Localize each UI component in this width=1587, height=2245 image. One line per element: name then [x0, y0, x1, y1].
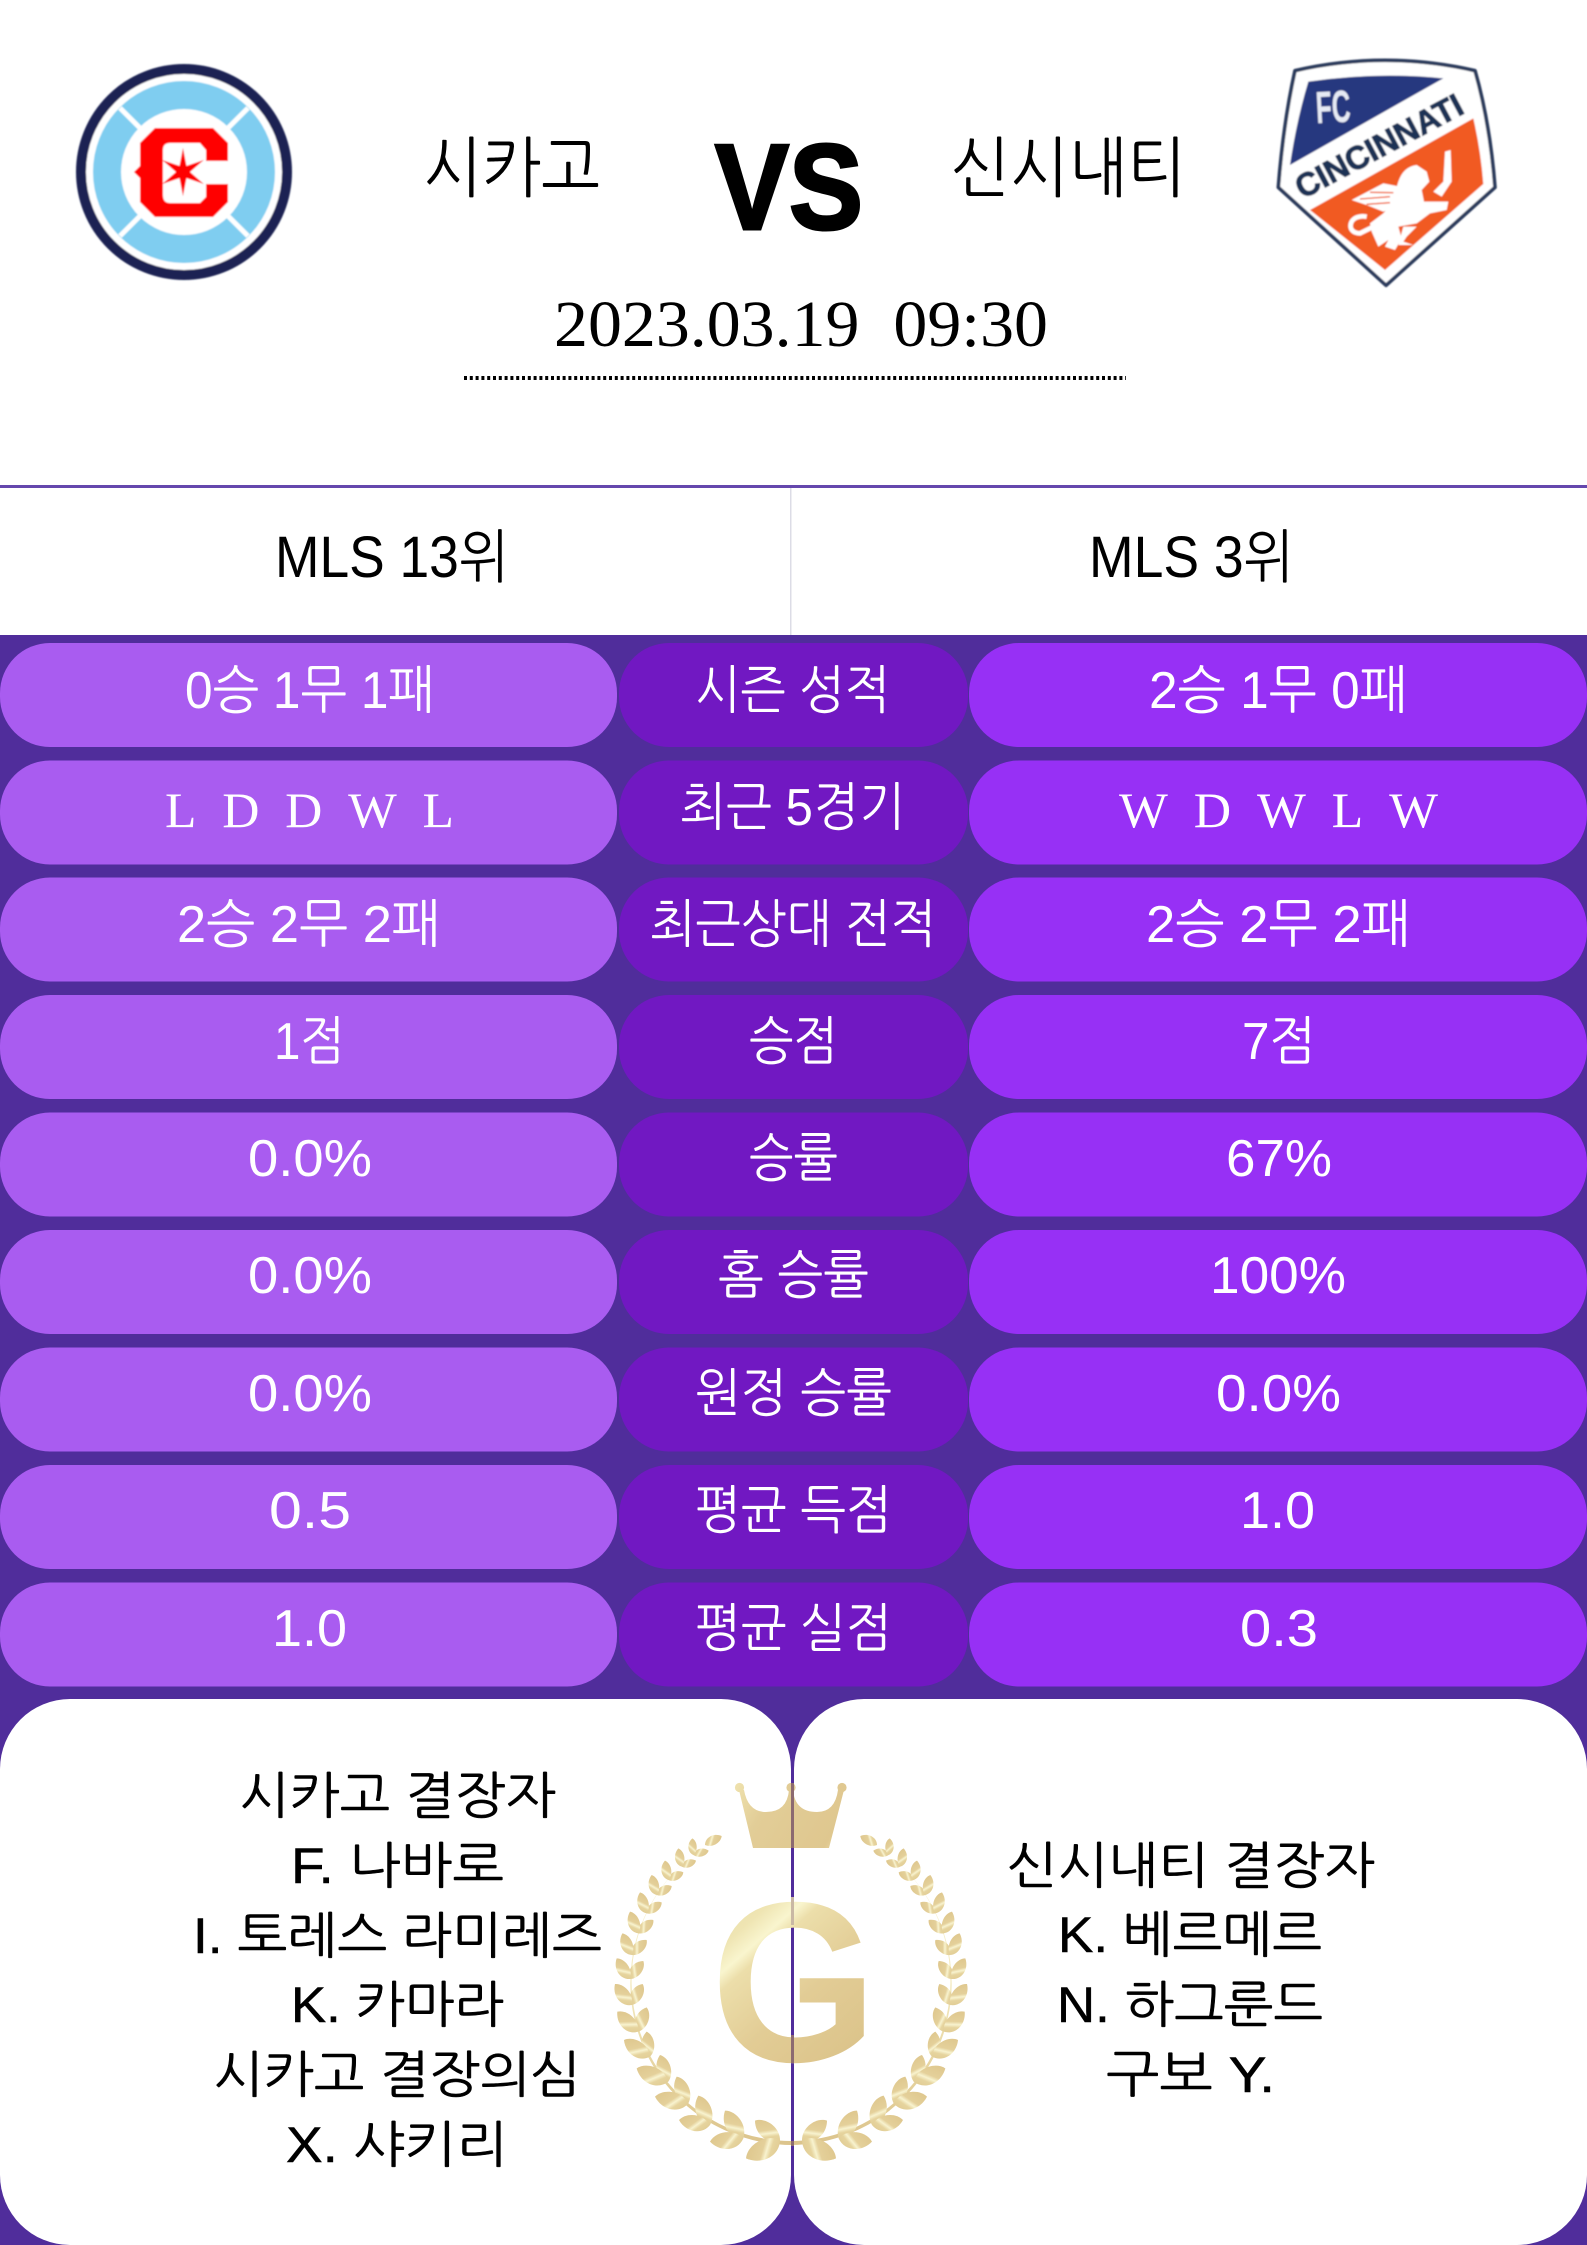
row: away win rate: 0.0% — [248, 1365, 372, 1423]
panel: Cincinnati absentees: 신시내티 결장자 — [1007, 1838, 1375, 1894]
panel: Cincinnati absentees: K. 베르메르 — [1058, 1907, 1322, 1963]
row: win rate: 0.0% — [248, 1130, 372, 1188]
standing: Chicago: MLS 13위 — [275, 525, 509, 590]
row: away win rate: 원정 승률 — [695, 1365, 892, 1423]
panel: Cincinnati absentees — [794, 1699, 1587, 2245]
panel: Chicago absentees: F. 나바로 — [291, 1838, 504, 1894]
row: win rate: 승률 — [749, 1130, 838, 1188]
row: average goals scored: 평균 득점 — [695, 1482, 892, 1540]
letter G: G — [711, 1856, 877, 2110]
row: average goals scored: 0.5 — [269, 1482, 351, 1540]
row: away win rate — [0, 1348, 1587, 1452]
row: average goals conceded: 1.0 — [272, 1600, 347, 1658]
row: points — [0, 995, 1587, 1099]
panel: Chicago absentees: X. 샤키리 — [286, 2117, 508, 2173]
row: average goals conceded — [0, 1582, 1587, 1686]
panel: Cincinnati absentees: 구보 Y. — [1106, 2047, 1275, 2103]
team name: Chicago: 시카고 — [423, 131, 600, 205]
row: home win rate: 홈 승률 — [718, 1247, 869, 1305]
row: last five matches: 최근 5경기 — [680, 779, 905, 837]
row: season record: 0승 1무 1패 — [185, 662, 435, 720]
row: home win rate — [0, 1230, 1587, 1334]
row: home win rate: 100% — [1210, 1247, 1346, 1305]
panel: Chicago absentees: I. 토레스 라미레즈 — [193, 1908, 602, 1964]
header rule — [0, 485, 1587, 488]
panel: Chicago absentees: 시카고 결장의심 — [213, 2047, 581, 2103]
icon: Chicago Fire crest — [81, 69, 287, 275]
row: home win rate: 0.0% — [248, 1247, 372, 1305]
team name: Cincinnati: 신시내티 — [951, 131, 1186, 205]
panel: Chicago absentees: K. 카마라 — [291, 1977, 504, 2033]
match date and time: 2023.03.19 09:30 — [554, 288, 1048, 361]
row: average goals conceded: 0.3 — [1240, 1600, 1318, 1658]
dotted underline — [464, 376, 1126, 380]
row: points: 승점 — [749, 1013, 838, 1071]
row: away win rate: 0.0% — [1216, 1365, 1341, 1423]
row: season record: 시즌 성적 — [695, 662, 890, 720]
row: head to head: 최근상대 전적 — [650, 896, 936, 954]
row: win rate: 67% — [1226, 1130, 1332, 1188]
VS mark: VS — [715, 119, 863, 255]
standing: Cincinnati: MLS 3위 — [1089, 525, 1294, 590]
panel: Cincinnati absentees: N. 하그룬드 — [1057, 1977, 1323, 2033]
row: last five matches — [0, 760, 1587, 864]
row: win rate — [0, 1112, 1587, 1216]
icon: FC Cincinnati crest: FC — [1315, 81, 1352, 133]
row: last five matches: W D W L W — [1119, 782, 1439, 838]
row: head to head: 2승 2무 2패 — [1146, 896, 1411, 954]
row: average goals conceded: 평균 실점 — [695, 1600, 892, 1658]
panel: Chicago absentees: 시카고 결장자 — [239, 1768, 556, 1824]
row: head to head: 2승 2무 2패 — [177, 896, 441, 954]
icon: FC Cincinnati crest: CINCINNATI — [1289, 86, 1469, 206]
row: points: 7점 — [1242, 1013, 1316, 1071]
row: average goals scored — [0, 1465, 1587, 1569]
row: season record: 2승 1무 0패 — [1149, 662, 1408, 720]
panel: Chicago absentees — [0, 1699, 791, 2245]
icon: gold crown and laurel emblem — [609, 1783, 973, 2168]
row: average goals scored: 1.0 — [1240, 1482, 1315, 1540]
row: season record — [0, 643, 1587, 747]
row: points: 1점 — [274, 1013, 345, 1071]
panel: stats table background — [0, 635, 1587, 2245]
row: head to head — [0, 878, 1587, 982]
icon: laurel wreath — [609, 1832, 973, 2168]
row: last five matches: L D D W L — [165, 782, 454, 838]
icon: FC Cincinnati crest — [1278, 60, 1495, 285]
icon: crown — [735, 1783, 847, 1848]
